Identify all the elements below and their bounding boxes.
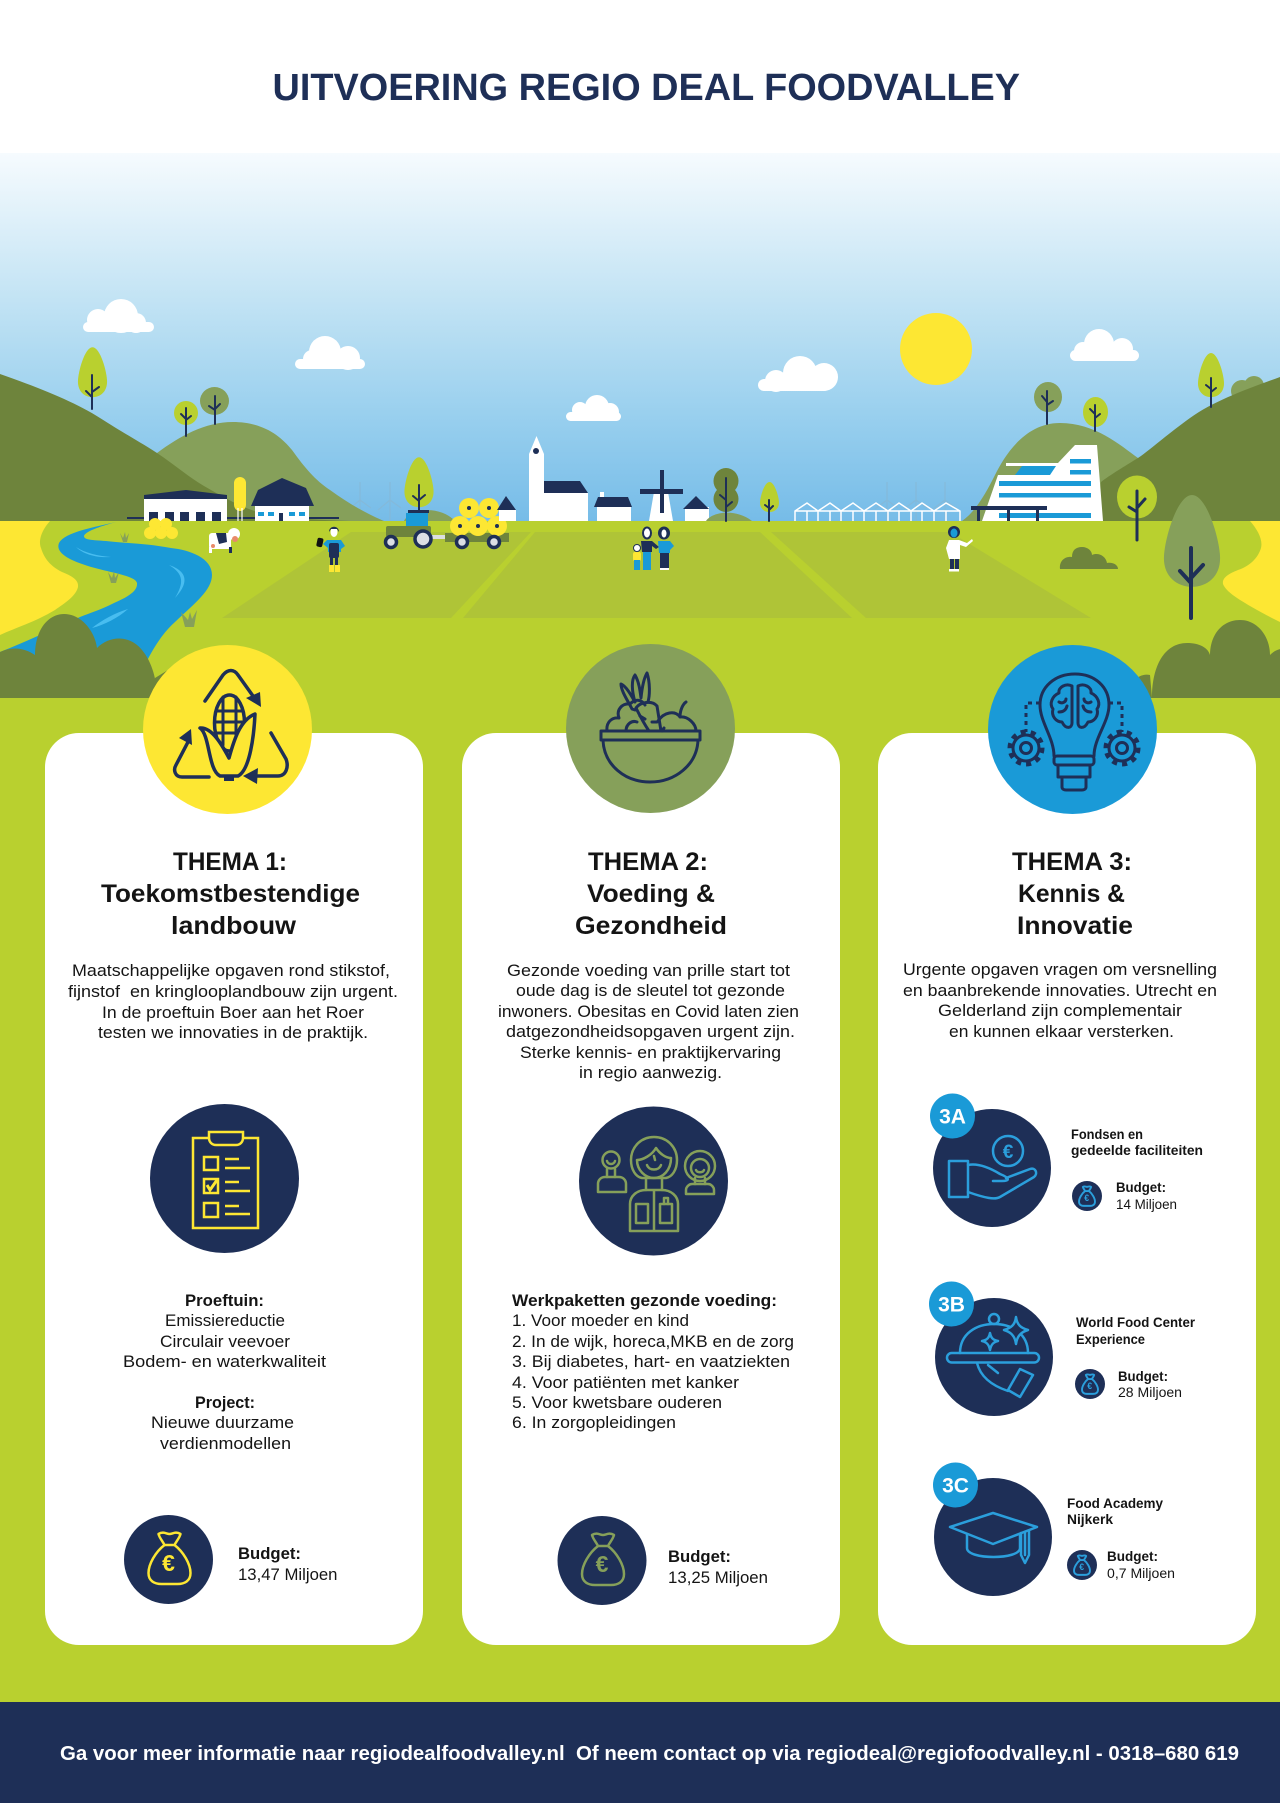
heading: THEMA 2: xyxy=(588,848,708,876)
modern building xyxy=(971,445,1103,521)
text block: intro: Maatschappelijke opgaven rond stikstof, xyxy=(72,962,390,980)
label xyxy=(1071,1127,1203,1158)
icon: small money bag xyxy=(1067,1550,1097,1580)
budget: 13,25 Miljoen xyxy=(668,1569,768,1587)
label: Fondsen en xyxy=(1071,1127,1143,1142)
heading xyxy=(101,848,360,940)
text block: proeftuin and project: Nieuwe duurzame xyxy=(151,1414,294,1432)
grass tufts xyxy=(108,532,197,627)
heading: THEMA 3: xyxy=(1012,848,1132,876)
trees and shrub on the right xyxy=(1060,476,1220,618)
text block: intro xyxy=(903,961,1217,1041)
heading xyxy=(575,848,727,940)
budget: 28 Miljoen xyxy=(1118,1385,1182,1400)
sky xyxy=(0,153,1280,521)
trees on hills xyxy=(78,347,1224,436)
icon: bowl with vegetables xyxy=(566,644,735,813)
budget xyxy=(238,1545,338,1584)
heading: Voeding & xyxy=(587,880,715,908)
heading: THEMA 1: xyxy=(173,848,287,876)
text block: proeftuin and project: Emissiereductie xyxy=(165,1312,285,1330)
text block: proeftuin and project: Proeftuin: xyxy=(185,1292,264,1310)
footer: Ga voor meer informatie naar regiodealfoodvalley.nl Of neem contact op via regiodeal@regiofoodvalley.nl - 0318–680 619 xyxy=(60,1743,1239,1765)
heading: landbouw xyxy=(171,912,297,940)
greenhouses xyxy=(795,503,960,521)
icon: hand with euro coin xyxy=(949,1136,1036,1198)
label: Experience xyxy=(1076,1332,1145,1347)
budget: 13,47 Miljoen xyxy=(238,1566,338,1584)
icon: money bag yellow xyxy=(124,1515,213,1604)
text block: intro: Sterke kennis- en praktijkervaring xyxy=(520,1044,781,1062)
badge 3A xyxy=(930,1094,975,1138)
text block: intro xyxy=(68,962,398,1042)
tractor and trailer with hay xyxy=(386,457,509,548)
text block: proeftuin and project: Circulair veevoer xyxy=(160,1333,291,1351)
text block: intro: fijnstof en kringlooplandbouw zijn urgent. xyxy=(68,983,398,1001)
text block: werkpaketten: 1. Voor moeder en kind xyxy=(512,1312,689,1330)
heading: Innovatie xyxy=(1017,912,1133,940)
badge 3C xyxy=(933,1462,978,1508)
family xyxy=(633,526,674,570)
icon: money bag yellow: € xyxy=(162,1550,175,1576)
badge 3B: 3B xyxy=(938,1294,965,1316)
label: Food Academy xyxy=(1067,1496,1163,1511)
label: gedeelde faciliteiten xyxy=(1071,1143,1203,1158)
heading: Toekomstbestendige xyxy=(101,880,360,908)
scientist xyxy=(946,526,973,572)
text block: intro: Urgente opgaven vragen om versnelling xyxy=(903,961,1217,979)
text block: intro: Gelderland zijn complementair xyxy=(938,1002,1183,1020)
text block: proeftuin and project: verdienmodellen xyxy=(160,1435,291,1453)
icon: small money bag xyxy=(1075,1369,1105,1399)
text block: proeftuin and project: Bodem- en waterkwaliteit xyxy=(123,1353,326,1371)
cow xyxy=(209,528,240,553)
text block: intro: testen we innovaties in de praktijk. xyxy=(98,1024,368,1042)
text block: proeftuin and project: Project: xyxy=(195,1394,255,1412)
text block: intro: datgezondheidsopgaven urgent zijn. xyxy=(506,1023,795,1041)
label: World Food Center xyxy=(1076,1315,1196,1330)
label: Nijkerk xyxy=(1067,1512,1113,1527)
budget: Budget: xyxy=(238,1545,301,1563)
panel: thema 1 xyxy=(45,645,423,1645)
title: UITVOERING REGIO DEAL FOODVALLEY xyxy=(272,67,1020,109)
text block: werkpaketten xyxy=(512,1292,794,1432)
foreground bushes xyxy=(0,614,1280,698)
icon: money bag olive: € xyxy=(596,1551,609,1577)
badge 3B xyxy=(929,1282,974,1326)
field plots xyxy=(222,532,1091,618)
icon: graduation cap xyxy=(950,1513,1037,1563)
item 3C xyxy=(933,1462,1175,1596)
distant wind turbines xyxy=(348,482,956,521)
text block: werkpaketten: 4. Voor patiënten met kanker xyxy=(512,1374,740,1392)
text block: werkpaketten: Werkpaketten gezonde voeding: xyxy=(512,1292,777,1310)
icon: people xyxy=(579,1106,728,1256)
badge 3A: 3A xyxy=(939,1106,966,1128)
budget: Budget: xyxy=(668,1548,731,1566)
icon: small money bag xyxy=(1072,1181,1102,1211)
budget: Budget: xyxy=(1116,1180,1166,1195)
river xyxy=(0,522,212,690)
icon: hand with euro coin: € xyxy=(1003,1142,1014,1163)
heading: Gezondheid xyxy=(575,912,727,940)
badge 3C: 3C xyxy=(942,1474,969,1498)
item 3A xyxy=(930,1094,1203,1227)
icon: light bulb with brain and gears xyxy=(988,645,1157,814)
text block: intro: Gezonde voeding van prille start tot xyxy=(507,962,790,980)
hills xyxy=(0,374,1280,521)
heading xyxy=(1012,848,1133,940)
budget: 0,7 Miljoen xyxy=(1107,1566,1175,1581)
text block: intro: In de proeftuin Boer aan het Roer xyxy=(102,1004,365,1022)
icon: money bag olive xyxy=(558,1516,646,1605)
yellow fields xyxy=(0,521,78,635)
text block: werkpaketten: 3. Bij diabetes, hart- en vaatziekten xyxy=(512,1353,790,1371)
icon: serving tray xyxy=(947,1314,1039,1397)
panel: thema 3 xyxy=(878,645,1256,1645)
icon: corn with recycling arrows xyxy=(143,645,312,814)
text block: intro xyxy=(498,962,799,1082)
sun xyxy=(900,313,972,385)
text block: intro: in regio aanwezig. xyxy=(579,1064,722,1082)
budget xyxy=(668,1548,768,1587)
clouds xyxy=(83,299,1139,421)
budget: 14 Miljoen xyxy=(1116,1197,1177,1212)
text block: intro: inwoners. Obesitas en Covid laten zien xyxy=(498,1003,799,1021)
text block: intro: oude dag is de sleutel tot gezonde xyxy=(516,982,785,1000)
budget xyxy=(1118,1369,1182,1400)
icon: small money bag: € xyxy=(1087,1381,1092,1391)
budget: Budget: xyxy=(1118,1369,1168,1384)
icon: checklist xyxy=(150,1104,299,1253)
village: church, houses, windmill xyxy=(497,436,779,521)
text block: werkpaketten: 2. In de wijk, horeca,MKB en de zorg xyxy=(512,1333,794,1351)
budget xyxy=(1107,1549,1175,1581)
label xyxy=(1067,1496,1163,1527)
text block: werkpaketten: 6. In zorgopleidingen xyxy=(512,1414,676,1432)
item 3B xyxy=(929,1282,1196,1416)
heading: Kennis & xyxy=(1018,880,1125,908)
text block: intro: en kunnen elkaar versterken. xyxy=(949,1023,1174,1041)
budget xyxy=(1116,1180,1177,1212)
text block: werkpaketten: 5. Voor kwetsbare ouderen xyxy=(512,1394,722,1412)
text block: proeftuin and project xyxy=(123,1292,326,1453)
text block: intro: en baanbrekende innovaties. Utrecht en xyxy=(903,982,1217,1000)
icon: small money bag: € xyxy=(1084,1193,1089,1203)
farm buildings xyxy=(127,477,339,521)
icon: small money bag: € xyxy=(1079,1562,1084,1572)
farmer xyxy=(316,527,345,572)
panel: thema 2 xyxy=(462,644,840,1645)
hay bales xyxy=(144,518,178,539)
label xyxy=(1076,1315,1196,1347)
ground xyxy=(0,521,1280,1703)
footer xyxy=(0,1702,1280,1803)
budget: Budget: xyxy=(1107,1549,1158,1564)
